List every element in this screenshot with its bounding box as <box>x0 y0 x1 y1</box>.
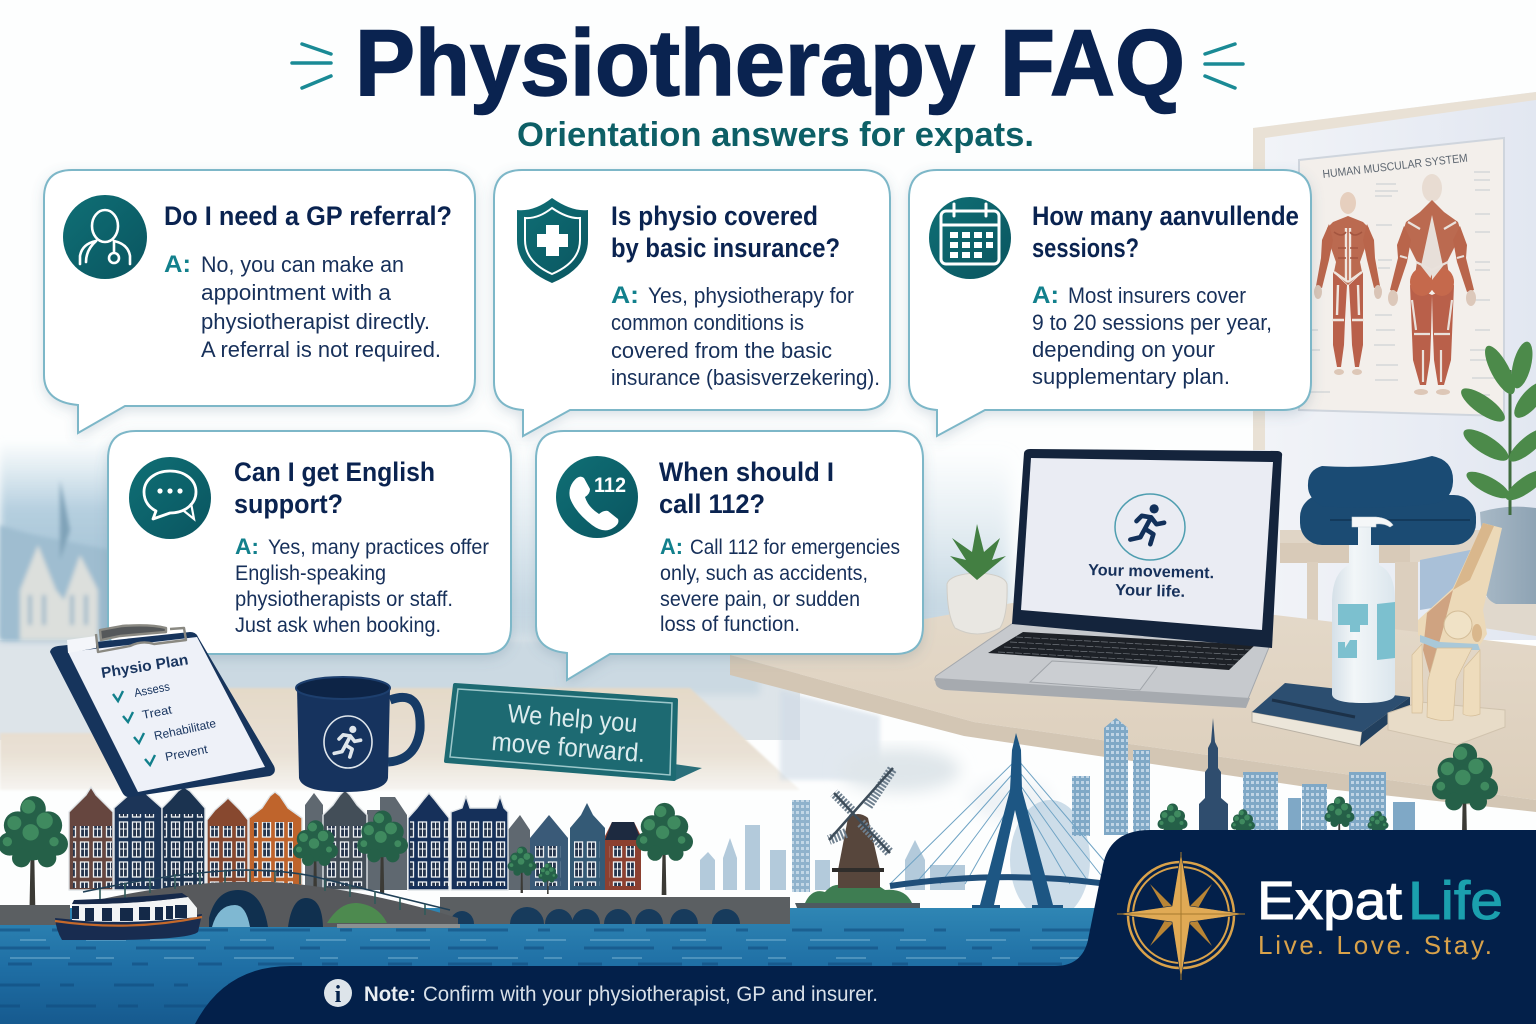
question: Do I need a GP referral? <box>164 201 452 231</box>
answer: Yes, physiotherapy for <box>648 283 854 308</box>
navy wide house <box>451 796 508 890</box>
answer: Call 112 for emergencies <box>690 536 900 559</box>
answer: physiotherapist directly. <box>201 309 430 334</box>
icon: calendar <box>929 197 1011 279</box>
bubble 4: English support <box>108 431 511 654</box>
red-brown house <box>207 798 248 890</box>
answer <box>611 282 880 390</box>
answer: only, such as accidents, <box>660 562 868 585</box>
hazy distant town <box>0 440 120 640</box>
clipboard heading: Physio Plan <box>100 651 190 682</box>
logo: wordmark: Live. Love. Stay. <box>1258 930 1492 960</box>
question: Is physio covered <box>611 201 818 231</box>
church tower <box>1199 718 1228 832</box>
bridge arches <box>209 890 323 927</box>
answer: physiotherapists or staff. <box>235 588 453 611</box>
note: Confirm with your physiotherapist, GP and insurer. <box>423 983 878 1006</box>
island <box>795 903 920 915</box>
clipboard checklist: Prevent <box>164 742 209 764</box>
clipboard: Physio Plan <box>50 625 275 797</box>
answer: A: <box>660 534 683 559</box>
street trees <box>0 796 693 909</box>
poster: human muscular system <box>1299 138 1504 416</box>
red house <box>605 822 641 890</box>
laptop caption: Your movement. <box>1088 562 1214 582</box>
bubble 3: sessions <box>909 170 1311 436</box>
navy house <box>162 787 205 890</box>
icon: chat bubbles <box>129 457 211 539</box>
question <box>234 457 435 519</box>
answer: A: <box>164 251 191 278</box>
title: Physiotherapy FAQ <box>355 10 1185 115</box>
mill sails <box>829 768 893 853</box>
poster caption lines <box>1310 172 1496 395</box>
answer: common conditions is <box>611 310 804 335</box>
sign text: We help you <box>507 698 638 738</box>
plant <box>1457 340 1536 604</box>
knee joint model <box>1388 523 1505 745</box>
answer: loss of function. <box>660 613 800 636</box>
subtitle: Orientation answers for expats. <box>517 116 1034 154</box>
logo: wordmark <box>1257 871 1503 960</box>
logo: wordmark: Life <box>1408 871 1503 931</box>
answer: A: <box>235 534 259 559</box>
question: support? <box>234 489 343 519</box>
question: by basic insurance? <box>611 233 840 263</box>
clipboard checklist <box>113 679 218 765</box>
hazy dome <box>1010 800 1090 920</box>
answer: Yes, many practices offer <box>268 536 489 559</box>
answer: No, you can make an <box>201 252 404 277</box>
distant skyline left of bridge <box>700 800 965 892</box>
windmill <box>795 768 920 915</box>
answer: Most insurers cover <box>1068 283 1246 308</box>
clouds behind skyline <box>840 748 1050 820</box>
cable-stayed bridge <box>890 733 1112 915</box>
towels <box>1300 456 1476 545</box>
tibia and fibula <box>1412 644 1480 721</box>
bubble 1: GP referral <box>44 170 475 433</box>
answer: 9 to 20 sessions per year, <box>1032 310 1272 335</box>
side table and shelf <box>1280 530 1536 640</box>
canal houses <box>69 787 641 890</box>
metal clip <box>96 625 186 652</box>
answer: Just ask when booking. <box>235 614 441 637</box>
mug logo <box>324 716 372 768</box>
quay strip <box>337 924 460 928</box>
clipboard checklist: Treat <box>141 702 174 722</box>
laptop screen <box>1012 449 1282 648</box>
answer: supplementary plan. <box>1032 364 1230 389</box>
sign text <box>491 698 646 768</box>
answer: covered from the basic <box>611 338 832 363</box>
laptop caption <box>1088 562 1214 601</box>
trees right <box>1158 743 1498 852</box>
answer: severe pain, or sudden <box>660 588 860 611</box>
answer <box>660 534 900 636</box>
question <box>611 201 840 263</box>
quadriceps <box>1423 590 1453 675</box>
laptop caption: Your life. <box>1115 582 1185 601</box>
answer <box>235 534 489 637</box>
icon: doctor <box>63 195 147 279</box>
laptop base <box>935 623 1272 704</box>
icon: phone 112: 112 <box>594 474 626 497</box>
clipboard checklist: Rehabilitate <box>153 716 218 743</box>
answer <box>1032 282 1272 389</box>
question <box>1032 201 1299 263</box>
water <box>0 908 1110 1024</box>
clipboard checklist: Assess <box>133 679 171 700</box>
grey house <box>323 790 367 890</box>
title accent right <box>1205 44 1243 88</box>
answer: appointment with a <box>201 280 392 305</box>
brown house <box>69 787 113 890</box>
title accent left <box>292 44 331 88</box>
laptop <box>935 449 1282 708</box>
answer: A: <box>1032 282 1059 309</box>
question: When should I <box>659 457 834 487</box>
logo: compass <box>1117 852 1245 980</box>
laptop logo <box>1115 494 1185 560</box>
canal boat <box>55 893 202 940</box>
note <box>324 979 878 1008</box>
background houses <box>305 793 530 890</box>
icon: shield with cross <box>517 198 588 283</box>
anatomy figure front <box>1314 192 1382 375</box>
model base <box>1388 702 1505 745</box>
question: Can I get English <box>234 457 435 487</box>
notebook <box>1252 683 1410 746</box>
answer: insurance (basisverzekering). <box>611 365 880 390</box>
icon: phone 112 <box>556 456 638 538</box>
mug <box>296 677 420 792</box>
poster title: HUMAN MUSCULAR SYSTEM <box>1322 153 1468 181</box>
bubble 2: insurance <box>494 170 890 436</box>
orange house <box>249 792 302 890</box>
arch stone bridge <box>75 870 460 928</box>
condyle <box>1444 611 1472 639</box>
answer: depending on your <box>1032 337 1215 362</box>
logo: wordmark: Expat <box>1257 871 1402 931</box>
sign text: move forward. <box>491 726 646 768</box>
navy house <box>408 793 449 890</box>
answer: A referral is not required. <box>201 337 441 362</box>
question <box>659 457 834 519</box>
slate house <box>570 803 605 890</box>
wall with wooden frame <box>1253 92 1536 640</box>
pump bottle <box>1332 517 1395 703</box>
answer: English-speaking <box>235 562 386 585</box>
skyscrapers <box>1072 718 1415 836</box>
bush <box>327 903 387 923</box>
laptop keyboard <box>988 632 1255 670</box>
small potted plant <box>947 524 1007 634</box>
footer note band and logo panel <box>195 830 1536 1024</box>
question: sessions? <box>1032 233 1139 263</box>
mill tower <box>838 814 880 888</box>
quay and canal arches <box>0 897 790 925</box>
right desk <box>730 603 1536 812</box>
windows <box>73 814 635 888</box>
icon: info <box>324 979 352 1008</box>
question: call 112? <box>659 489 765 519</box>
cartilage <box>1420 635 1480 650</box>
answer: A: <box>611 282 639 309</box>
note: Note: <box>364 983 416 1006</box>
question: How many aanvullende <box>1032 201 1299 231</box>
bridge railing <box>83 870 450 910</box>
femur <box>1418 523 1502 648</box>
anatomy figure back <box>1388 174 1476 395</box>
answer <box>164 251 441 362</box>
icon: info: i <box>335 982 342 1008</box>
bubble 5: call 112 <box>536 431 923 680</box>
skyline right <box>1010 718 1415 920</box>
slate house <box>530 815 568 890</box>
navy house <box>114 788 162 890</box>
desk sign <box>446 685 702 780</box>
left table <box>0 688 800 790</box>
